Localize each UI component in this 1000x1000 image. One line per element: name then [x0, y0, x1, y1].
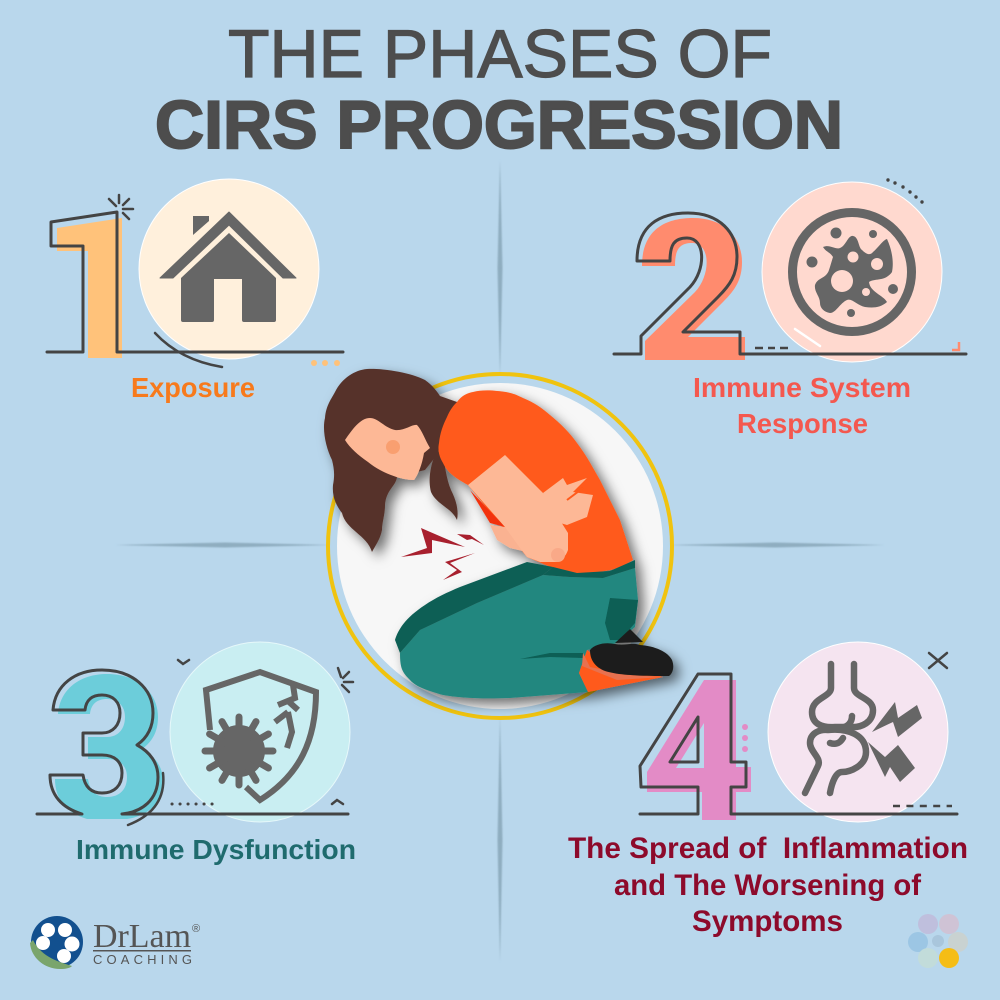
label: immune system response: Immune System — [693, 372, 911, 403]
panel: phase 2 immune system response — [614, 178, 966, 439]
icon: cracked shield with virus — [205, 672, 316, 800]
illustration: woman doubled over with stomach pain — [324, 369, 673, 698]
accent marks — [742, 653, 952, 806]
logo wordmark: ® — [192, 923, 200, 935]
label: spread of inflammation: Symptoms — [692, 905, 843, 938]
label: spread of inflammation: The Spread of Inflammation — [568, 832, 968, 865]
title — [155, 16, 843, 163]
central circle — [328, 374, 672, 718]
numeral 1 — [47, 212, 343, 358]
icon: inflamed joint — [805, 664, 922, 793]
icon: house — [160, 212, 296, 322]
face — [345, 418, 430, 480]
label: spread of inflammation — [568, 832, 968, 938]
accent marks — [128, 660, 353, 825]
title: THE PHASES OF — [228, 16, 772, 92]
icon circle 4 — [768, 642, 948, 822]
numeral 2 — [614, 213, 966, 360]
dots — [311, 360, 340, 366]
icon: cell in ring — [792, 212, 912, 332]
hair — [324, 369, 458, 552]
logo mark — [30, 916, 83, 969]
numeral 4 — [640, 674, 957, 820]
label: immune system response — [693, 372, 911, 439]
label: exposure: Exposure — [131, 372, 255, 403]
label: immune dysfunction: Immune Dysfunction — [76, 834, 356, 865]
arm and hand — [468, 455, 593, 562]
logo: DrLam Coaching — [30, 916, 200, 969]
shirt — [438, 390, 633, 573]
label: immune system response: Response — [737, 408, 868, 439]
logo wordmark — [93, 918, 200, 967]
title: CIRS PROGRESSION — [155, 87, 843, 163]
label: spread of inflammation: and The Worsening of — [614, 869, 921, 902]
icon: pain bolts — [401, 528, 484, 580]
panel: phase 4 spread of inflammation — [568, 642, 968, 938]
panel: phase 3 immune dysfunction — [37, 642, 356, 865]
logo wordmark: COACHING — [93, 952, 192, 967]
shoe — [579, 629, 673, 692]
watermark flower — [908, 914, 968, 968]
pants — [400, 568, 638, 698]
numeral 3 — [37, 670, 348, 819]
spark and accent marks — [109, 195, 222, 367]
icon circle 1 — [139, 179, 319, 359]
icon circle 2 — [762, 182, 942, 362]
accent marks — [755, 178, 959, 350]
panel: phase 1 exposure — [47, 179, 343, 403]
pants shading — [395, 560, 638, 659]
logo wordmark: DrLam — [93, 918, 191, 955]
icon circle 3 — [170, 642, 350, 822]
